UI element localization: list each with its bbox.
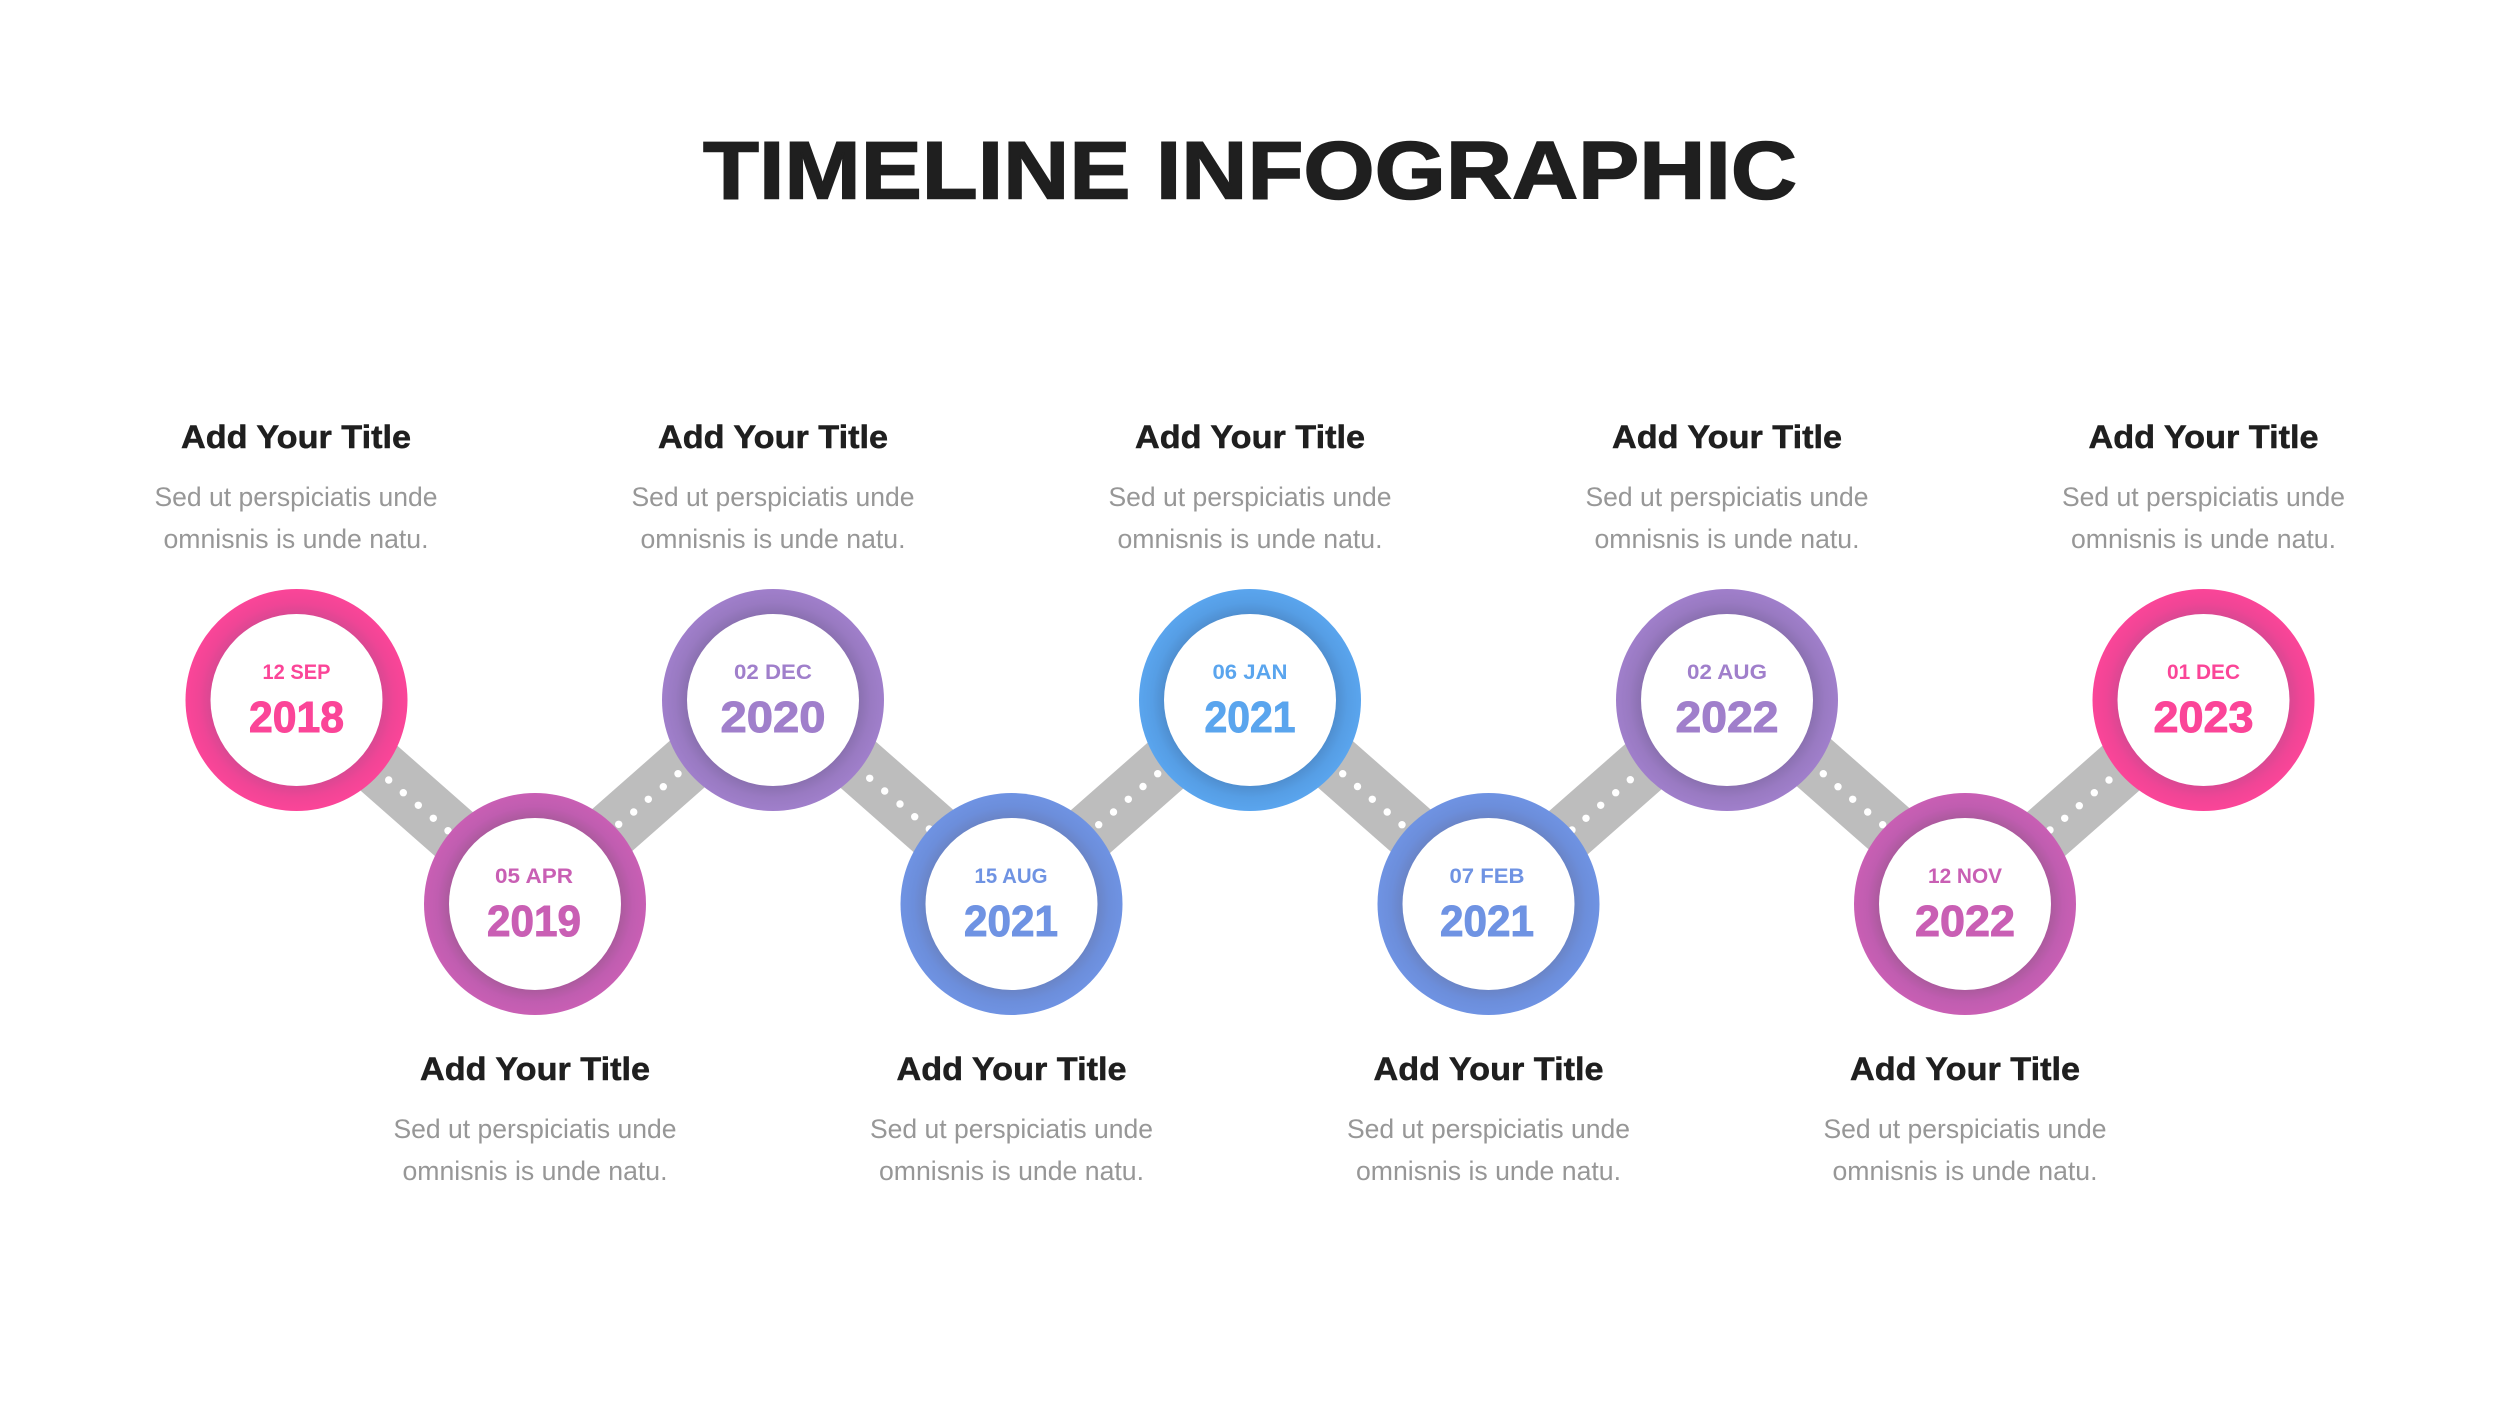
text block: 02 Aug 2022: Sed ut perspiciatis unde [1586,482,1868,512]
milestone: 02 Dec 2020: 02 DEC [734,661,812,684]
connector: 2022 to 2023 [2009,739,2154,866]
text block: 2020: Add Your Title [658,419,888,455]
milestone: 07 Feb 2021: 07 FEB [1450,865,1524,888]
connector: 2018 to 2019 [343,737,488,864]
milestone: 06 Jan 2021 [1139,589,1361,811]
text block: 06 Jan 2021: Sed ut perspiciatis unde [1108,482,1392,512]
milestone: 05 Apr 2019: 2019 [487,897,581,946]
text block: 15 Aug 2021: omnisnis is unde natu. [879,1156,1144,1186]
text block: 2020: Sed ut perspiciatis unde [632,482,914,512]
milestone: 02 Aug 2022: 2022 [1676,693,1778,742]
milestone: 12 Nov 2022 [1854,793,2076,1015]
text block: 2018: omnisnis is unde natu. [164,524,428,554]
text block: 2018: Sed ut perspiciatis unde [154,482,438,512]
milestone: 02 Dec 2020 [662,589,884,811]
text block: 02 Aug 2022: omnisnis is unde natu. [1594,524,1860,554]
milestone: 02 Aug 2022: 02 AUG [1687,661,1767,684]
text block: 15 Aug 2021: Add Your Title [896,1051,1126,1087]
text block: 2023: Sed ut perspiciatis unde [2062,482,2345,512]
text block: 12 Nov 2022: Add Your Title [1850,1051,2080,1087]
connector: 2019 to 2020 [578,732,723,860]
text block: 12 Nov 2022: omnisnis is unde natu. [1832,1156,2098,1186]
text block: 07 Feb 2021 [1347,1051,1630,1186]
text block: 07 Feb 2021: Sed ut perspiciatis unde [1347,1114,1630,1144]
text block: 2019: Add Your Title [420,1051,650,1087]
milestone: 05 Apr 2019 [424,793,646,1015]
milestone: 15 Aug 2021: 15 AUG [974,865,1048,888]
milestone: 06 Jan 2021: 06 JAN [1212,661,1288,684]
text block: 06 Jan 2021: omnisnis is unde natu. [1118,524,1382,554]
text block: 2023: Add Your Title [2088,419,2318,455]
text block: 07 Feb 2021: Add Your Title [1374,1051,1604,1087]
text block: 02 Aug 2022 [1586,419,1868,554]
milestone: 12 Nov 2022: 2022 [1915,897,2015,946]
text block: 2023: omnisnis is unde natu. [2071,524,2336,554]
milestone: 15 Aug 2021: 2021 [964,897,1058,946]
text block: 12 Nov 2022 [1824,1051,2106,1186]
text block: 2020: omnisnis is unde natu. [640,524,906,554]
milestone: 12 Sep 2018 [186,589,408,811]
connector: 2021 to 2022 [1531,738,1676,866]
milestone: 01 Dec 2023: 2023 [2154,693,2254,742]
text block: 2018 [154,419,438,554]
milestone: 05 Apr 2019: 05 APR [495,865,573,888]
text block: 12 Nov 2022: Sed ut perspiciatis unde [1824,1114,2106,1144]
milestone: 07 Feb 2021 [1378,793,1600,1015]
milestone: 02 Dec 2020: 2020 [720,693,826,742]
milestone: 12 Sep 2018: 2018 [249,693,344,742]
milestone: 01 Dec 2023: 01 DEC [2167,661,2240,684]
text block: 07 Feb 2021: omnisnis is unde natu. [1356,1156,1621,1186]
text block: 2020 [632,419,914,554]
milestone: 15 Aug 2021 [900,793,1122,1015]
text block: 2019: Sed ut perspiciatis unde [394,1114,676,1144]
text block: 2019 [394,1051,676,1186]
text block: 2019: omnisnis is unde natu. [402,1156,668,1186]
connector: 2021 to 2021 second [1297,731,1442,858]
milestone: 12 Sep 2018: 12 SEP [262,661,330,684]
text block: 15 Aug 2021 [870,1051,1153,1186]
title: TIMELINE INFOGRAPHIC [703,126,1797,216]
text block: 06 Jan 2021 [1108,419,1392,554]
milestone: 01 Dec 2023 [2092,589,2314,811]
text block: 02 Aug 2022: Add Your Title [1612,419,1842,455]
milestone: 12 Nov 2022: 12 NOV [1928,865,2002,888]
milestone: 06 Jan 2021: 2021 [1204,693,1296,742]
text block: 2018: Add Your Title [181,419,411,455]
connector: 2022 to 2022 [1778,731,1923,858]
text block: 06 Jan 2021: Add Your Title [1135,419,1365,455]
milestone: 02 Aug 2022 [1616,589,1838,811]
connector: 2020 to 2021 [825,736,970,863]
connector: 2021 to 2021 [1058,732,1203,860]
text block: 2023 [2062,419,2345,554]
milestone: 07 Feb 2021: 2021 [1440,897,1534,946]
text block: 15 Aug 2021: Sed ut perspiciatis unde [870,1114,1153,1144]
